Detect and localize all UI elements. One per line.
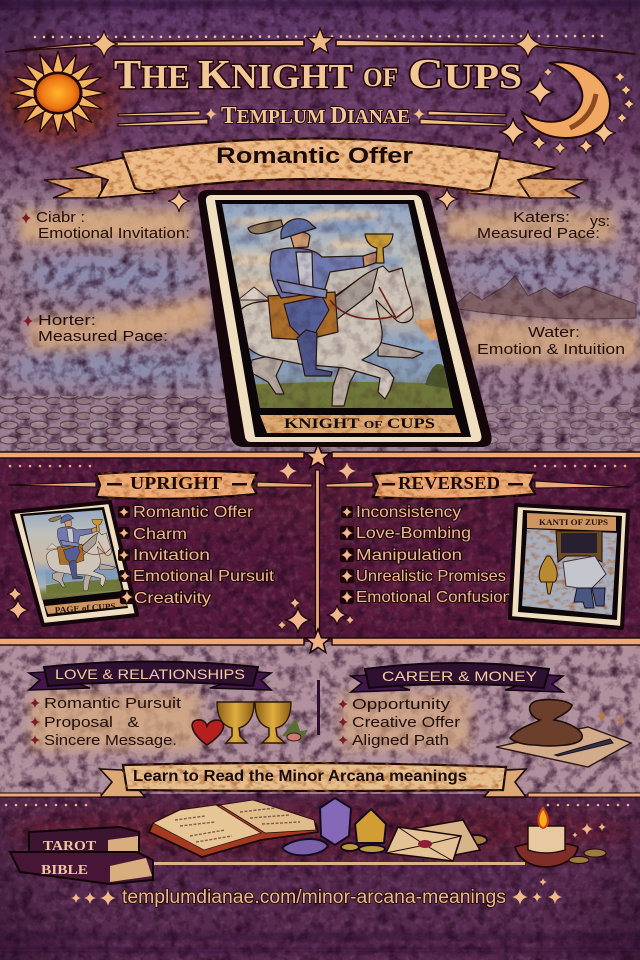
banner: UPRIGHT: UPRIGHT bbox=[130, 473, 222, 493]
career and money list: Opportunity bbox=[352, 696, 451, 713]
title: THE bbox=[114, 51, 190, 97]
reversed meanings list: Emotional Confusion bbox=[356, 589, 512, 606]
title bbox=[114, 51, 522, 98]
upright mini card: PAGE of CUPS bbox=[54, 601, 116, 615]
icon: heart bbox=[192, 720, 223, 745]
card illustration bbox=[215, 200, 460, 410]
icon: two goblets bbox=[217, 702, 291, 743]
left upper label: Ciabr : bbox=[36, 209, 85, 226]
upright meanings list: Charm bbox=[133, 526, 187, 543]
reversed mini card bbox=[510, 505, 628, 628]
footer rules and dots bbox=[0, 793, 640, 805]
right lower label: Emotion & Intuition bbox=[477, 341, 625, 358]
right lower label bbox=[477, 324, 625, 358]
reversed meanings list: Manipulation bbox=[356, 547, 462, 564]
career and money list: Creative Offer bbox=[352, 714, 460, 731]
career and money list: Aligned Path bbox=[352, 732, 449, 749]
love and relationships list: Romantic Pursuit bbox=[44, 695, 182, 712]
banner: UPRIGHT bbox=[96, 471, 257, 499]
reversed meanings list: Love-Bombing bbox=[356, 525, 471, 542]
banner: career and money: CAREER & MONEY bbox=[382, 668, 538, 684]
shelf line bbox=[153, 862, 525, 865]
icon: roses bbox=[282, 718, 308, 741]
left lower label: Measured Pace: bbox=[38, 328, 168, 345]
icon: parchment, pouch and pen bbox=[496, 700, 631, 767]
title: CUPS bbox=[408, 52, 522, 98]
upright meanings list: Romantic Offer bbox=[133, 504, 254, 521]
parchment wash bands behind labels bbox=[20, 210, 640, 750]
right upper label bbox=[477, 209, 610, 242]
love and relationships list: Sincere Message. bbox=[44, 732, 177, 749]
title: KNIGHT bbox=[198, 51, 353, 97]
panel: top header background bbox=[0, 0, 640, 200]
icon: crescent moon bbox=[522, 62, 610, 138]
reversed meanings list bbox=[341, 504, 512, 606]
reversed meanings list: Inconsistency bbox=[356, 504, 461, 521]
right upper label: ys: bbox=[590, 213, 610, 230]
panel: upright and reversed background bbox=[0, 452, 640, 642]
banner: REVERSED: REVERSED bbox=[398, 473, 500, 493]
title: OF bbox=[363, 63, 398, 92]
icon: mountains bbox=[452, 276, 636, 319]
icon: open book bbox=[149, 800, 318, 857]
upright meanings list bbox=[119, 504, 275, 607]
banner: Romantic Offer bbox=[44, 138, 588, 198]
section divider: card to meanings bbox=[0, 444, 640, 468]
sparkle clusters bbox=[7, 586, 355, 633]
banner: REVERSED bbox=[373, 471, 535, 499]
left upper label bbox=[21, 209, 190, 242]
decorative stars beside card bbox=[168, 188, 458, 212]
banner: Romantic Offer: Romantic Offer bbox=[216, 143, 414, 168]
banner: career and money bbox=[351, 663, 563, 692]
panel: footer background bbox=[0, 794, 640, 960]
icon: book stack bbox=[10, 827, 153, 884]
icon: book stack: TAROT bbox=[43, 839, 97, 854]
left lower label: Horter: bbox=[38, 312, 96, 329]
icon: candle in bowl bbox=[515, 808, 606, 867]
card label: KNIGHT OF CUPS bbox=[284, 416, 435, 432]
footer sparkle cluster bbox=[539, 823, 606, 886]
panel: landscape background bbox=[0, 200, 640, 452]
top ornamental rule bbox=[5, 28, 635, 58]
upright mini card bbox=[12, 502, 137, 625]
icon: sun bbox=[10, 51, 106, 135]
icon: envelope and letter bbox=[386, 820, 480, 861]
icon: book stack: BIBLE bbox=[41, 863, 88, 878]
banner: learn to read: Learn to Read the Minor Arcana meanings bbox=[133, 768, 467, 785]
reversed mini card: KANTI OF ZUPS bbox=[539, 517, 608, 527]
left upper label: Emotional Invitation: bbox=[38, 225, 190, 242]
vertical divider between upright and reversed bbox=[316, 470, 320, 635]
reversed meanings list: Unrealistic Promises bbox=[356, 568, 506, 585]
vertical topic divider bbox=[317, 680, 320, 735]
card label bbox=[260, 415, 461, 433]
upright meanings list: Creativity bbox=[134, 590, 211, 607]
career and money list bbox=[338, 696, 460, 749]
banner: love and relationships bbox=[29, 662, 271, 690]
main tarot card bbox=[198, 190, 492, 447]
stars around the moon bbox=[499, 67, 635, 155]
love and relationships list bbox=[30, 695, 182, 749]
banner: learn to read bbox=[100, 763, 526, 797]
section divider: meanings to topics bbox=[0, 629, 640, 653]
subtitle with side rules bbox=[118, 103, 506, 129]
love and relationships list: Proposal & bbox=[44, 714, 139, 731]
website link with sparkles: templumdianae.com/minor-arcana-meanings bbox=[122, 887, 506, 908]
upright meanings list: Emotional Pursuit bbox=[133, 568, 275, 585]
right lower label: Water: bbox=[528, 324, 580, 341]
right upper label: Measured Pace: bbox=[477, 225, 600, 242]
left lower label bbox=[23, 312, 168, 345]
banner side rules and stars bbox=[8, 462, 630, 488]
panel: love and career background bbox=[0, 642, 640, 794]
upright meanings list: Invitation bbox=[133, 547, 210, 564]
subtitle with side rules: TEMPLUM DIANAE bbox=[221, 103, 410, 129]
right upper label: Katers: bbox=[513, 209, 570, 226]
banner: love and relationships: LOVE & RELATIONSHIPS bbox=[55, 666, 245, 682]
icon: crystals bbox=[282, 798, 487, 855]
